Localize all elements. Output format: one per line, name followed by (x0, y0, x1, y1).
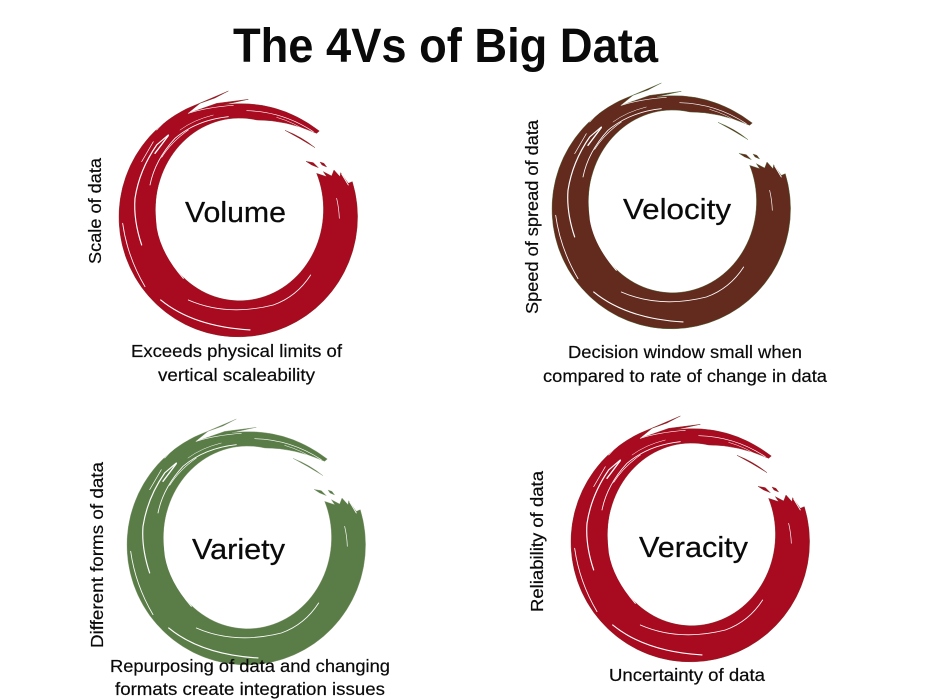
caption: velocity: Decision window small when (568, 342, 802, 362)
caption: variety (110, 656, 390, 699)
caption: velocity (543, 342, 827, 386)
side note: scale of data: Scale of data (85, 158, 105, 264)
brush ring: volume (119, 91, 358, 337)
caption: veracity: Uncertainty of data (609, 665, 765, 685)
caption: variety: Repurposing of data and changing (110, 656, 390, 676)
caption: velocity: compared to rate of change in data (543, 366, 827, 386)
caption: volume: Exceeds physical limits of (131, 341, 342, 361)
brush ring: velocity (552, 83, 791, 329)
label: veracity: Veracity (639, 532, 749, 564)
caption: volume: vertical scaleability (158, 365, 315, 385)
side note: reliability of data: Reliability of data (527, 471, 547, 612)
side note: speed of spread of data: Speed of spread of data (522, 120, 542, 314)
panel: variety (87, 419, 390, 699)
label: variety: Variety (192, 534, 286, 566)
caption: volume (131, 341, 342, 385)
panel: velocity (522, 83, 827, 386)
label: volume: Volume (185, 197, 286, 229)
panel: volume (85, 91, 358, 385)
brush ring: variety (127, 419, 366, 665)
panel: veracity (527, 416, 810, 685)
label: velocity: Velocity (623, 194, 732, 226)
side note: different forms of data: Different forms of data (87, 462, 107, 648)
caption: variety: formats create integration issues (115, 679, 385, 699)
brush ring: veracity (571, 416, 810, 662)
title: The 4Vs of Big Data (233, 20, 658, 73)
